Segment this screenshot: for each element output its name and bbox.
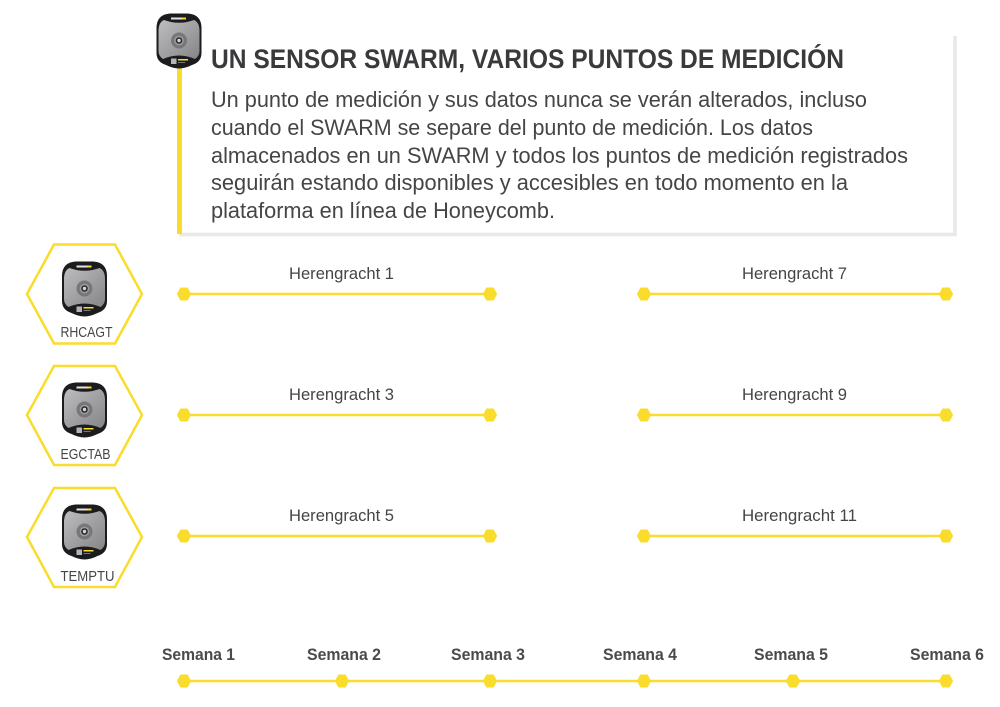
sensor badge: EGCTAB: EGCTAB xyxy=(60,446,110,463)
timeline: Herengracht 1 xyxy=(178,264,496,300)
week axis: Semana 3 xyxy=(451,646,525,664)
week axis: Semana 5 xyxy=(754,646,828,664)
intro text: Un punto de medición y sus datos nunca se verán alterados, incluso xyxy=(211,87,867,112)
sensor badge: EGCTAB xyxy=(27,366,142,465)
timeline: Herengracht 11 xyxy=(638,506,952,542)
week axis xyxy=(162,646,984,686)
heading: UN SENSOR SWARM, VARIOS PUNTOS DE MEDICIÓN xyxy=(211,43,844,74)
panel shadow border xyxy=(179,36,955,234)
sensor badge: TEMPTU: TEMPTU xyxy=(60,568,114,585)
timeline: Herengracht 3 xyxy=(178,385,496,420)
timeline: Herengracht 7: Herengracht 7 xyxy=(742,264,847,283)
timeline: Herengracht 9: Herengracht 9 xyxy=(742,385,847,404)
intro text: almacenados en un SWARM y todos los puntos de medición registrados xyxy=(211,143,908,168)
intro text: cuando el SWARM se separe del punto de medición. Los datos xyxy=(211,115,813,140)
intro text: plataforma en línea de Honeycomb. xyxy=(211,198,555,223)
panel: intro xyxy=(177,36,955,234)
timeline: Herengracht 7 xyxy=(638,264,952,300)
sensor badge: RHCAGT xyxy=(27,244,142,344)
sensor badge: TEMPTU xyxy=(27,488,142,587)
timeline: Herengracht 5: Herengracht 5 xyxy=(289,506,394,525)
week axis: Semana 4 xyxy=(603,646,678,664)
week axis: Semana 2 xyxy=(307,646,381,664)
sensor badge: RHCAGT: RHCAGT xyxy=(60,324,112,341)
intro text: seguirán estando disponibles y accesibles en todo momento en la xyxy=(211,170,849,195)
icon: main sensor xyxy=(156,14,202,68)
timeline: Herengracht 11: Herengracht 11 xyxy=(742,506,857,525)
week axis: Semana 6 xyxy=(910,646,984,664)
week axis: Semana 1 xyxy=(162,646,235,664)
timeline: Herengracht 5 xyxy=(178,506,496,542)
yellow accent bar xyxy=(177,60,182,234)
timeline: Herengracht 1: Herengracht 1 xyxy=(289,264,394,283)
timeline: Herengracht 9 xyxy=(638,385,952,420)
intro text xyxy=(211,87,908,223)
timeline: Herengracht 3: Herengracht 3 xyxy=(289,385,394,404)
